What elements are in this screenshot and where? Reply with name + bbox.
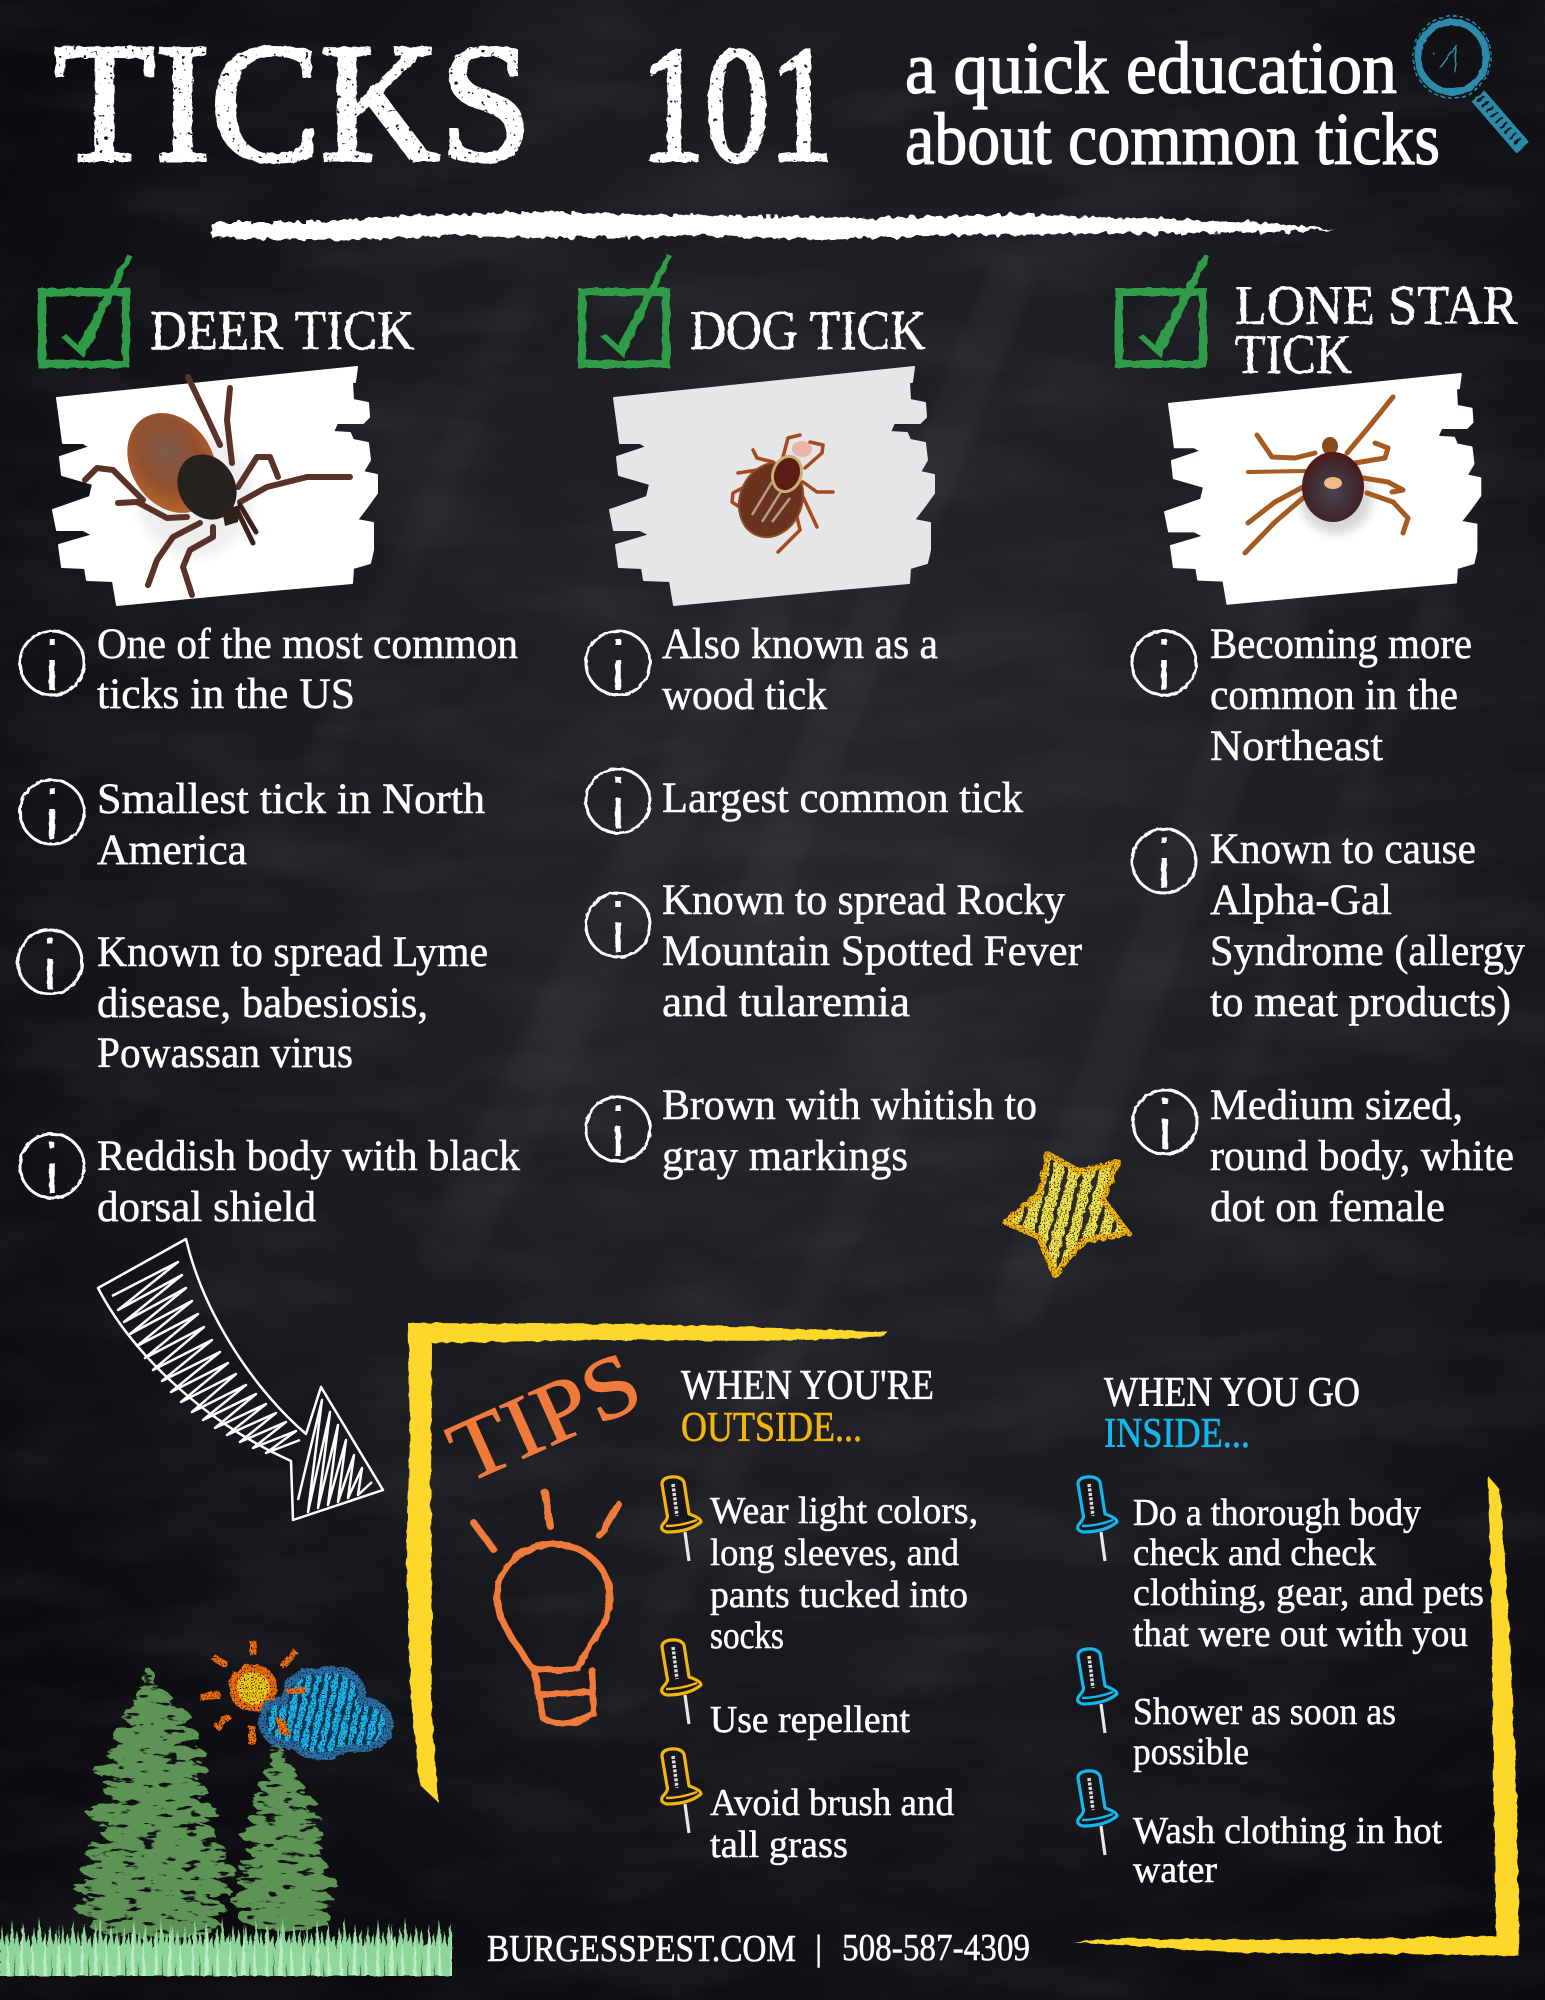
inside tips text: Shower as soon as <box>1133 1691 1396 1733</box>
heading: inside <box>1104 1370 1360 1457</box>
title: 101 <box>640 12 834 196</box>
dog tick facts: Known to spread Rocky <box>662 877 1065 924</box>
lone star tick facts: Becoming more <box>1210 621 1472 668</box>
icons: yellow pins <box>662 1477 701 1833</box>
dog tick facts: Mountain Spotted Fever <box>662 928 1082 975</box>
outside tips text: Use repellent <box>710 1699 910 1741</box>
heading: dog tick: DOG TICK <box>690 300 926 362</box>
photo: lone star tick <box>1165 374 1480 604</box>
lone star tick facts: common in the <box>1210 672 1458 719</box>
lone star tick facts: Northeast <box>1210 723 1383 770</box>
inside tips text: check and check <box>1133 1532 1376 1574</box>
footer contact line: BURGESSPEST.COM <box>487 1928 796 1970</box>
heading: lone star tick: TICK <box>1235 324 1352 386</box>
heading: inside: INSIDE... <box>1104 1411 1250 1457</box>
divider: chalk stroke <box>210 212 1335 240</box>
panel: deer tick <box>42 254 414 605</box>
info icons column 2 <box>586 631 650 1161</box>
inside tips text <box>1133 1492 1484 1891</box>
heading: deer tick: DEER TICK <box>150 300 414 362</box>
icon: green checkbox <box>1119 254 1209 364</box>
dog tick facts <box>662 621 1082 1180</box>
title: TICKS <box>54 9 532 197</box>
heading: lone star tick <box>1235 275 1519 386</box>
dog tick facts: Also known as a <box>662 621 938 668</box>
deer tick facts: America <box>97 827 247 874</box>
inside tips text: that were out with you <box>1133 1613 1468 1655</box>
panel: lone star tick <box>1119 254 1519 604</box>
deer tick facts: ticks in the US <box>97 671 355 718</box>
tips: when you're outside <box>662 1363 978 1866</box>
outside tips text: tall grass <box>710 1824 848 1866</box>
inside tips text: clothing, gear, and pets <box>1133 1572 1484 1614</box>
outside tips text <box>710 1490 978 1866</box>
outside tips text: Wear light colors, <box>710 1490 978 1532</box>
icon: grass <box>0 1917 452 1976</box>
dog tick facts: Largest common tick <box>662 775 1023 822</box>
panel: dog tick <box>582 254 934 605</box>
heading: lone star tick: LONE STAR <box>1235 275 1519 337</box>
lone star tick facts: dot on female <box>1210 1184 1445 1231</box>
outside tips text: Avoid brush and <box>710 1782 954 1824</box>
photo: deer tick <box>53 367 377 605</box>
deer tick facts: Powassan virus <box>97 1030 353 1077</box>
title <box>54 9 834 197</box>
dog tick facts: and tularemia <box>662 979 910 1026</box>
icon: magnifying glass <box>1413 16 1523 148</box>
deer tick facts: dorsal shield <box>97 1184 316 1231</box>
heading: tips: TIPS <box>435 1333 655 1502</box>
arrow pointing to tips <box>98 1239 383 1520</box>
lone star tick facts: Syndrome (allergy <box>1210 928 1525 975</box>
deer tick facts: Smallest tick in North <box>97 776 485 823</box>
heading: outside: WHEN YOU'RE <box>681 1363 934 1409</box>
subtitle <box>905 28 1440 181</box>
tips: when you go inside <box>1078 1370 1484 1891</box>
icon: light bulb <box>473 1492 618 1723</box>
lone star tick facts: Known to cause <box>1210 826 1476 873</box>
inside tips text: possible <box>1133 1731 1249 1773</box>
icons: blue pins <box>1078 1477 1117 1855</box>
heading: inside: WHEN YOU GO <box>1104 1370 1360 1416</box>
deer tick facts: disease, babesiosis, <box>97 980 428 1027</box>
dog tick facts: Brown with whitish to <box>662 1082 1037 1129</box>
inside tips text: Do a thorough body <box>1133 1492 1421 1534</box>
deer tick facts <box>97 621 520 1231</box>
outside tips text: socks <box>710 1615 784 1657</box>
photo: dog tick <box>610 367 934 605</box>
inside tips text: water <box>1133 1849 1217 1891</box>
panel: tips frame <box>406 1323 1519 1956</box>
dog tick facts: gray markings <box>662 1133 908 1180</box>
info icons column 1 <box>18 631 84 1198</box>
heading: outside: OUTSIDE... <box>681 1405 862 1451</box>
dog tick facts: wood tick <box>662 672 827 719</box>
icon: yellow chalk star <box>1005 1154 1128 1275</box>
footer contact line: 508-587-4309 <box>842 1927 1030 1969</box>
icon: cloud <box>262 1670 389 1756</box>
outside tips text: long sleeves, and <box>710 1532 959 1574</box>
info icons column 3 <box>1132 631 1197 1154</box>
icon: sun <box>200 1641 296 1745</box>
subtitle: about common ticks <box>905 99 1440 181</box>
footer contact line: | <box>815 1928 822 1968</box>
deer tick facts: Known to spread Lyme <box>97 929 488 976</box>
footer contact line <box>487 1927 1030 1970</box>
lone star tick facts <box>1210 621 1525 1231</box>
outside tips text: pants tucked into <box>710 1574 968 1616</box>
lone star tick facts: round body, white <box>1210 1133 1514 1180</box>
icon: green checkbox <box>582 254 672 364</box>
lone star tick facts: Alpha-Gal <box>1210 877 1392 924</box>
heading: outside <box>681 1363 934 1451</box>
inside tips text: Wash clothing in hot <box>1133 1810 1442 1852</box>
lone star tick facts: Medium sized, <box>1210 1082 1463 1129</box>
lone star tick facts: to meat products) <box>1210 979 1511 1026</box>
deer tick facts: One of the most common <box>97 621 518 668</box>
icon: pine trees <box>73 1669 337 1937</box>
deer tick facts: Reddish body with black <box>97 1133 520 1180</box>
icon: green checkbox <box>42 254 132 364</box>
subtitle: a quick education <box>905 28 1397 110</box>
